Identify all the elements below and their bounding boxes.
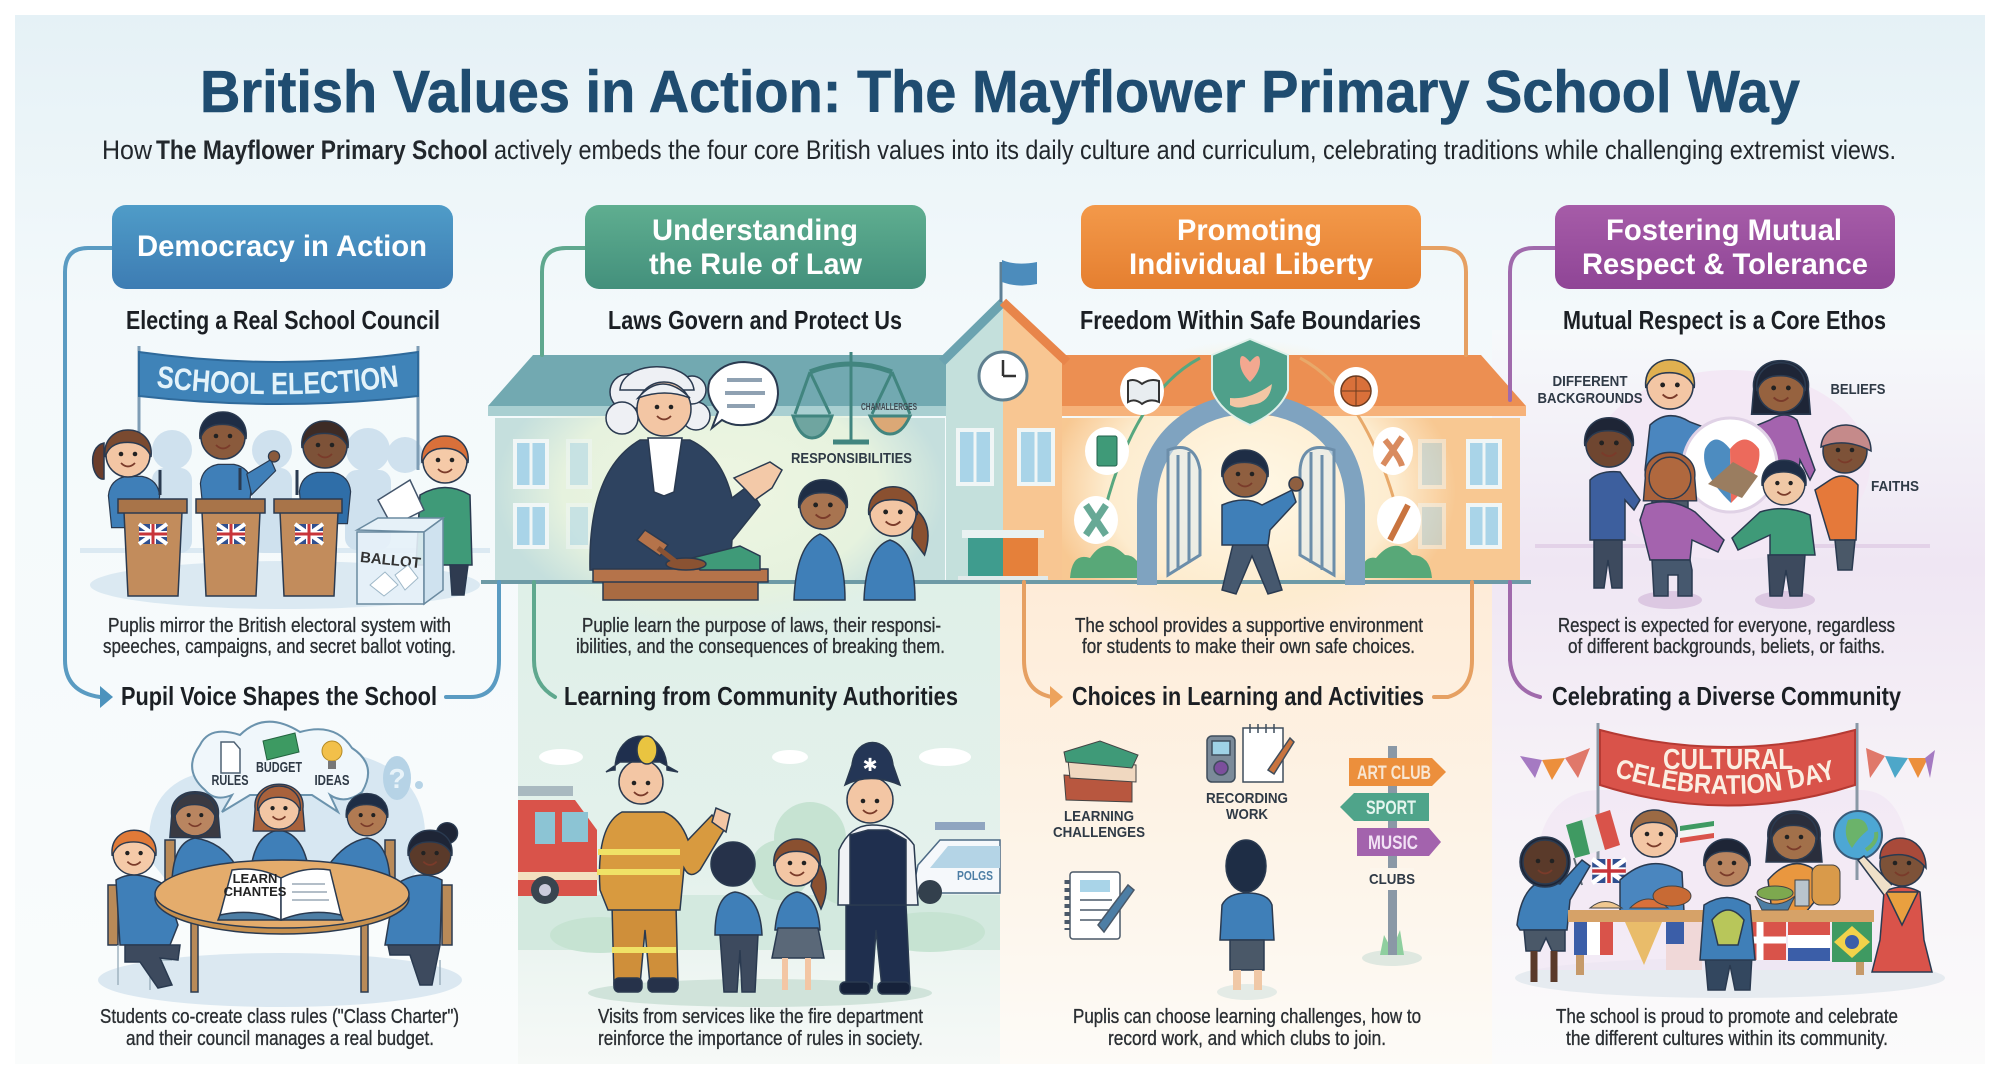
panel: mutual respect — [1508, 205, 1945, 1050]
flag: brazil — [1832, 922, 1872, 962]
speech bubble — [708, 362, 778, 428]
label: faiths: FAITHS — [1871, 478, 1919, 495]
connector: blue — [65, 248, 499, 697]
description: laws: Puplie learn the purpose of laws, their responsi- — [582, 615, 941, 637]
subheading: pupil voice: Pupil Voice Shapes the School — [121, 681, 437, 711]
icon: clock — [979, 352, 1027, 400]
subheading: choices: Choices in Learning and Activities — [1072, 681, 1424, 711]
label: recording work — [1206, 790, 1288, 823]
arrow: blue — [100, 686, 113, 708]
panel: individual liberty — [1024, 205, 1472, 1050]
shield — [1212, 339, 1288, 425]
desk with gavel and book — [593, 530, 768, 600]
sign: sport: SPORT — [1366, 798, 1416, 819]
handshake emblem — [1683, 418, 1777, 512]
heading box: respect — [1555, 205, 1895, 289]
subheading: community authorities: Learning from Community Authorities — [564, 681, 958, 711]
sign: art club — [1349, 758, 1446, 786]
panel: democracy — [63, 205, 501, 1050]
pupil voting — [416, 436, 472, 595]
description: class charter: Students co-create class rules ("Class Charter") — [100, 1006, 459, 1028]
open book: LEARN — [233, 871, 277, 886]
subheading: core ethos: Mutual Respect is a Core Ethos — [1563, 305, 1886, 335]
pupil bodies — [1590, 415, 1858, 596]
title: British Values in Action: The Mayflower Primary School Way — [200, 59, 1800, 125]
pupil from behind — [1217, 840, 1277, 1000]
label: recording work: RECORDING — [1206, 790, 1288, 807]
description: electoral system — [103, 615, 456, 658]
icon: paint tools — [1383, 437, 1402, 466]
label: responsibilities: RESPONSIBILITIES — [791, 450, 912, 467]
label: learning challenges: CHALLENGES — [1053, 824, 1145, 841]
heading box: liberty: Promoting — [1177, 214, 1322, 247]
heading box: rule of law: Understanding — [652, 214, 858, 247]
firefighter — [597, 736, 730, 992]
label: different backgrounds: DIFFERENT — [1552, 373, 1628, 390]
flag: france — [1574, 922, 1613, 955]
scales of justice — [793, 352, 910, 442]
judge — [590, 367, 782, 570]
pupils at table — [108, 784, 458, 992]
heading box: liberty: Individual Liberty — [1129, 248, 1373, 281]
description: class charter: and their council manages a real budget. — [126, 1028, 434, 1050]
sign: art club: ART CLUB — [1357, 763, 1431, 784]
subheading: freedom: Freedom Within Safe Boundaries — [1080, 305, 1421, 335]
label: different backgrounds: BACKGROUNDS — [1538, 390, 1642, 407]
icon: question mark — [383, 756, 423, 800]
open book — [218, 869, 343, 920]
description: safe choices — [1075, 615, 1423, 658]
police car — [912, 822, 1000, 904]
panel: rule of law — [518, 205, 1000, 1050]
food table with flags — [1568, 865, 1874, 975]
sign: sport — [1340, 793, 1429, 821]
connector: purple — [1510, 248, 1555, 697]
arrow: orange — [1050, 686, 1063, 708]
police officer: ✱ — [862, 755, 878, 775]
illustration: choices — [1053, 724, 1446, 1000]
label: learning challenges: LEARNING — [1064, 808, 1134, 825]
flag: usa — [1666, 922, 1702, 970]
description: laws: ibilities, and the consequences of breaking them. — [576, 636, 945, 658]
description: cultures — [1556, 1006, 1898, 1050]
banner: cultural celebration day: CELEBRATION DAY — [1616, 760, 1832, 794]
description: class charter — [100, 1006, 459, 1050]
description: services: reinforce the importance of rules in society. — [598, 1028, 923, 1050]
description: respect: Respect is expected for everyone, regardless — [1558, 615, 1895, 637]
icon: flag — [1001, 260, 1037, 302]
icon: question mark: ? — [388, 763, 406, 794]
flags held — [1566, 810, 1714, 885]
illustration: class council — [98, 722, 462, 1007]
walking pupil — [1222, 450, 1303, 594]
description: respect: of different backgrounds, beliets, or faiths. — [1568, 636, 1885, 658]
icon: stacked books — [1064, 741, 1138, 802]
table — [155, 860, 409, 992]
subheading: diverse community: Celebrating a Diverse Community — [1552, 681, 1901, 711]
two pupils from behind — [711, 839, 826, 992]
icon: basketball — [1341, 376, 1371, 406]
subtitle: How — [102, 135, 152, 165]
thought cloud: BUDGET — [256, 759, 302, 776]
label: beliefs: BELIEFS — [1830, 381, 1886, 398]
thought cloud — [192, 722, 368, 812]
subheading: laws: Laws Govern and Protect Us — [608, 305, 902, 335]
police car: POLGS — [957, 868, 993, 883]
icon: globe — [1834, 811, 1882, 859]
illustration: judge — [590, 352, 928, 600]
description: cultures: The school is proud to promote and celebrate — [1556, 1006, 1898, 1028]
icon: ruler and pencil — [1086, 505, 1106, 535]
subtitle: The Mayflower Primary School — [156, 135, 488, 165]
pupils — [1517, 810, 1932, 982]
heading box: rule of law: the Rule of Law — [649, 248, 863, 281]
heading box: rule of law — [585, 205, 926, 289]
icon: paintbrush — [1390, 505, 1408, 540]
sign: music — [1357, 828, 1441, 856]
pupil heads — [1585, 360, 1871, 505]
heading box: respect: Fostering Mutual — [1606, 214, 1842, 247]
fire engine — [518, 786, 598, 904]
label: learning challenges — [1053, 808, 1145, 841]
ballot box — [357, 480, 443, 604]
icon: banknote — [263, 733, 299, 760]
sign: music: MUSIC — [1368, 833, 1418, 854]
illustration: circle of pupils — [1535, 360, 1930, 609]
icon circles — [1074, 367, 1421, 544]
police officer — [838, 742, 918, 994]
description: electoral system: speeches, campaigns, and secret ballot voting. — [103, 636, 456, 658]
description: respect — [1558, 615, 1895, 658]
description: learning choices: Puplis can choose learning challenges, how to — [1073, 1006, 1421, 1028]
banner: cultural celebration day — [1599, 728, 1856, 806]
heading box: democracy: Democracy in Action — [137, 230, 427, 263]
label: clubs: CLUBS — [1369, 871, 1415, 888]
heading box: democracy — [112, 205, 453, 289]
icon: notebook and pencil — [1067, 872, 1134, 939]
description: laws — [576, 615, 945, 658]
illustration: fire and police visit — [518, 736, 1000, 1007]
label: different backgrounds — [1538, 373, 1642, 407]
description: services: Visits from services like the fire department — [598, 1006, 923, 1028]
description: learning choices — [1073, 1006, 1421, 1050]
pupil with dish — [1700, 839, 1755, 990]
connector: green — [534, 248, 585, 697]
description: learning choices: record work, and which clubs to join. — [1108, 1028, 1386, 1050]
description: safe choices: The school provides a supportive environment — [1075, 615, 1423, 637]
podiums — [118, 499, 342, 596]
heading box: respect: Respect & Tolerance — [1582, 248, 1868, 281]
pupils — [794, 480, 928, 600]
label: challenges: CHAMALLERGES — [861, 402, 917, 413]
bunting — [1520, 748, 1935, 780]
description: safe choices: for students to make their own safe choices. — [1082, 636, 1415, 658]
illustration: cultural day — [1515, 723, 1945, 998]
description: electoral system: Puplis mirror the British electoral system with — [108, 615, 451, 637]
illustration: school election — [80, 346, 490, 609]
banner: SCHOOL ELECTION — [157, 365, 398, 394]
heading box: liberty — [1081, 205, 1421, 289]
windows — [515, 430, 1500, 547]
banner: cultural celebration day: CULTURAL — [1663, 744, 1793, 776]
ballot box: BALLOT — [359, 549, 422, 572]
subheading: electing: Electing a Real School Council — [126, 305, 440, 335]
icon: notebook — [1097, 436, 1117, 466]
bushes — [1070, 546, 1432, 578]
arch and gates — [1147, 404, 1355, 585]
connector: orange — [1024, 248, 1472, 697]
flag: netherlands — [1788, 922, 1830, 961]
icon: light bulb — [322, 741, 342, 769]
open book: CHANTES — [224, 884, 287, 899]
thought cloud: IDEAS — [314, 772, 350, 789]
illustration: gate — [1070, 339, 1432, 594]
dotted arc — [1100, 358, 1402, 530]
icon: open book — [1128, 380, 1159, 404]
description: services — [598, 1006, 923, 1050]
door — [958, 530, 1048, 582]
pupil candidates — [93, 412, 472, 596]
icon: document — [221, 742, 240, 773]
signpost — [1340, 746, 1446, 966]
description: cultures: the different cultures within its community. — [1566, 1028, 1888, 1050]
icon: recorder and notepad — [1207, 724, 1294, 782]
label: recording work: WORK — [1226, 806, 1268, 823]
flag: denmark — [1746, 922, 1786, 960]
thought cloud: RULES — [212, 772, 248, 789]
school building — [481, 260, 1531, 640]
